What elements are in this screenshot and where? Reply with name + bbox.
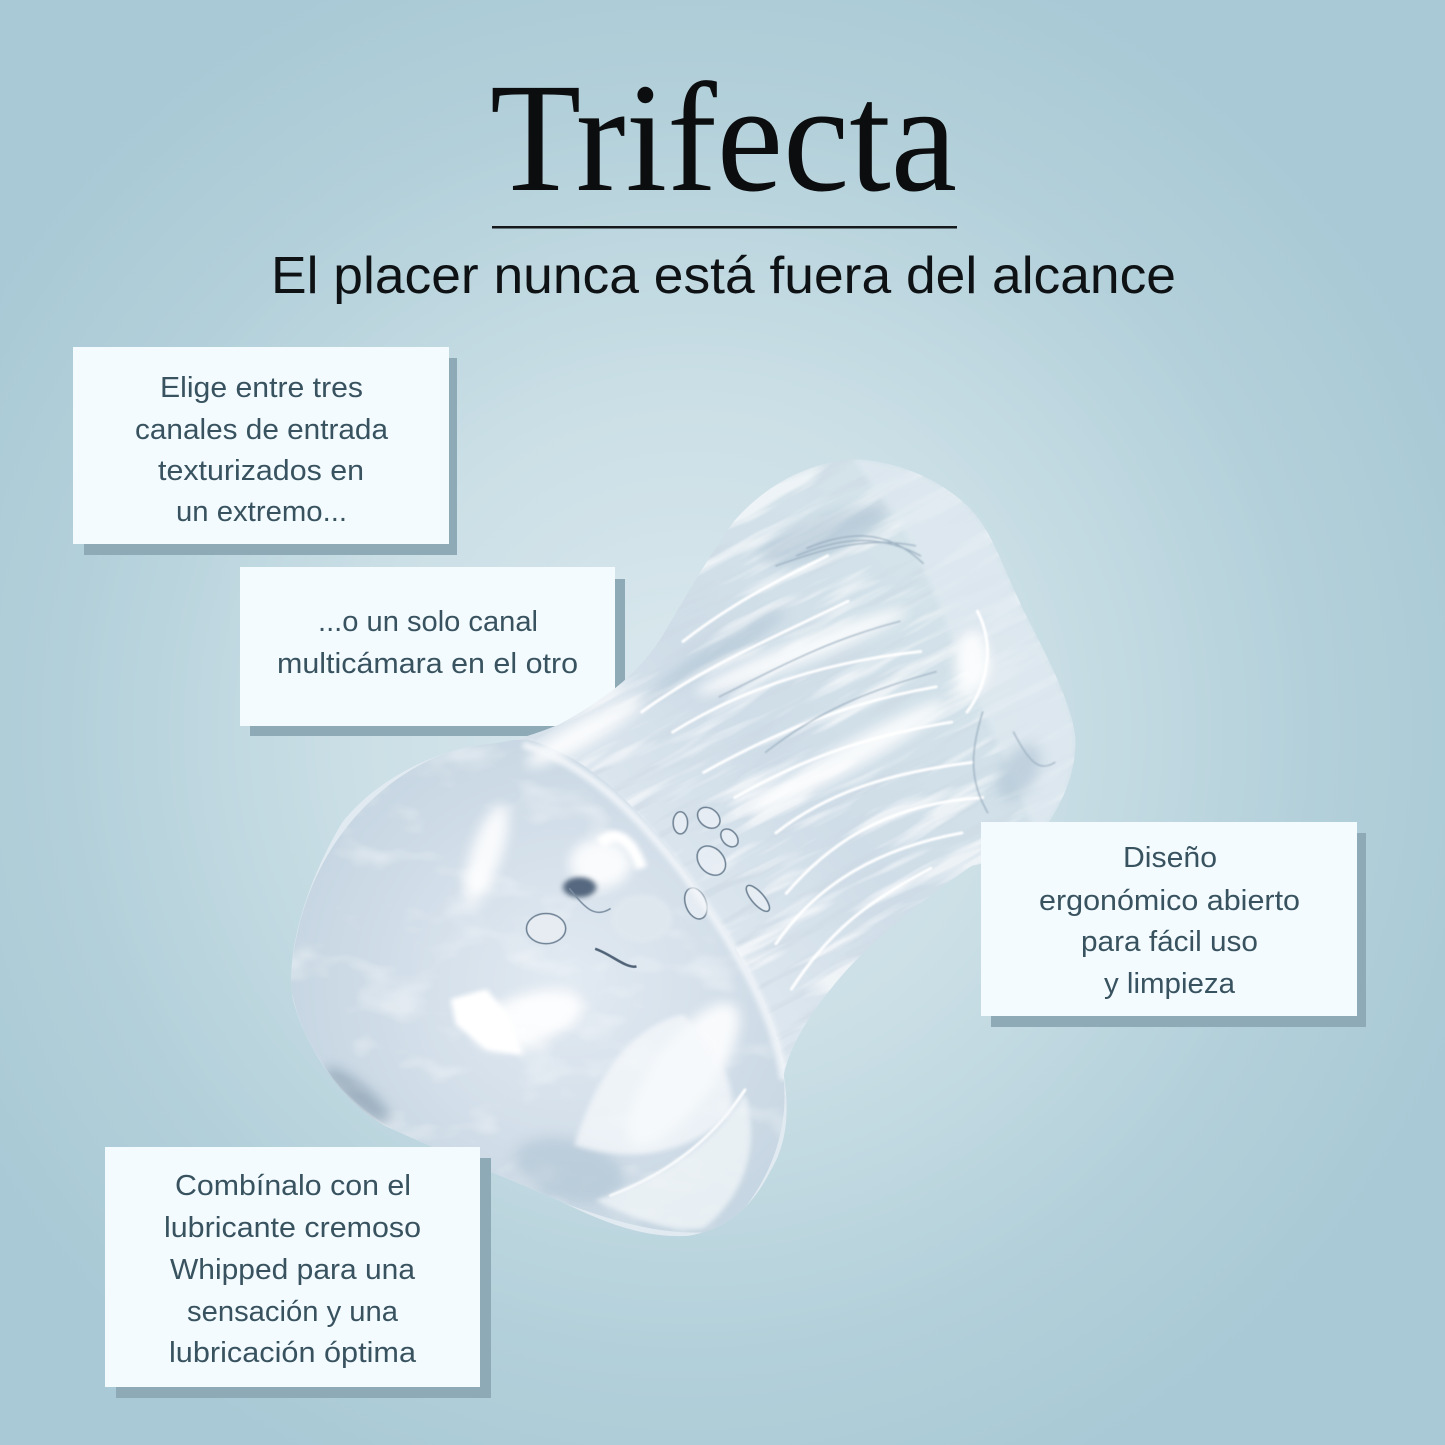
- shaded zones: [319, 496, 1049, 1214]
- title: Trifecta: [490, 51, 957, 224]
- product: clear textured sleeve: [291, 460, 1076, 1236]
- inner cavity: [526, 836, 673, 967]
- callout: single multi-chamber channel: multicámara en el otro: [277, 648, 578, 680]
- callout: whipped lubricant: [105, 1147, 491, 1398]
- subtitle: El placer nunca está fuera del alcance: [271, 247, 1176, 305]
- body streak texture: [574, 466, 1064, 995]
- callout: single multi-chamber channel: ...o un solo canal: [318, 606, 538, 638]
- callout: whipped lubricant: Whipped para una: [170, 1254, 416, 1286]
- callout: three entry channels: canales de entrada: [135, 414, 389, 446]
- sleeve body: [292, 616, 1026, 1236]
- callout: three entry channels: Elige entre tres: [160, 372, 363, 404]
- callout: ergonomic open design: para fácil uso: [1081, 926, 1258, 958]
- callout: whipped lubricant: lubricante cremoso: [164, 1212, 421, 1244]
- callout: ergonomic open design: y limpieza: [1104, 968, 1236, 1000]
- fine rib lines: [719, 536, 1055, 813]
- soft highlights: [456, 600, 990, 1162]
- callout: whipped lubricant: sensación y una: [187, 1296, 399, 1328]
- title underline: [492, 226, 957, 228]
- creamy lower lip: [574, 1014, 732, 1154]
- callout: whipped lubricant: Combínalo con el: [175, 1170, 411, 1202]
- face swirl texture: [292, 746, 783, 1184]
- callout: three entry channels: un extremo...: [176, 496, 347, 528]
- ribbed streaks: [611, 556, 987, 1196]
- callout: ergonomic open design: [981, 822, 1366, 1027]
- bumps ring: [673, 803, 773, 922]
- white highlight on the face: [450, 989, 523, 1055]
- callout: ergonomic open design: ergonómico abierto: [1039, 885, 1300, 917]
- sleeve front face: [290, 740, 785, 1233]
- callout: ergonomic open design: Diseño: [1123, 842, 1217, 874]
- callout: whipped lubricant: lubricación óptima: [169, 1337, 417, 1369]
- sleeve end rim: [863, 464, 1073, 822]
- rim edge: [523, 745, 784, 1080]
- callout: three entry channels: texturizados en: [158, 455, 364, 487]
- callout: three entry channels: [73, 347, 457, 555]
- callout: single multi-chamber channel: [240, 567, 625, 736]
